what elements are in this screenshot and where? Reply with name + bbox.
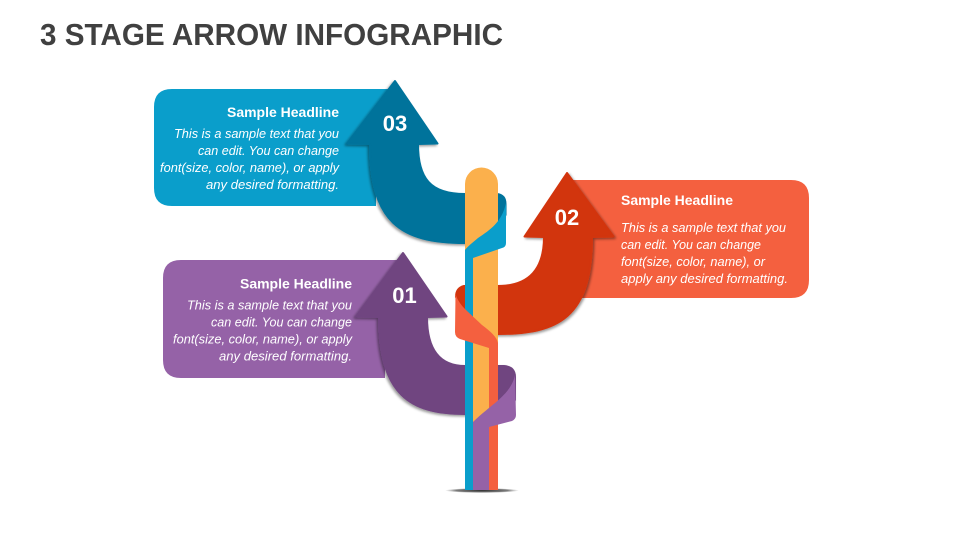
base shadow <box>445 488 519 493</box>
body text: This is a sample text that you <box>621 221 786 235</box>
body text: can edit. You can change <box>621 238 761 252</box>
stage numbers: 01 <box>392 283 417 308</box>
body text <box>160 127 340 192</box>
arrow 03 <box>347 81 506 243</box>
arrow 01 <box>356 253 515 414</box>
headline: Sample Headline <box>227 104 339 120</box>
body text: any desired formatting. <box>206 178 339 192</box>
arrow 02 <box>456 173 614 334</box>
body text <box>173 298 353 364</box>
panel: stage 03 card <box>154 89 395 206</box>
stage numbers: 02 <box>555 205 579 230</box>
body text: any desired formatting. <box>219 350 352 364</box>
blue ribbon <box>465 203 506 490</box>
purple ribbon <box>473 375 516 490</box>
central pole <box>465 168 498 490</box>
stage numbers <box>383 111 579 308</box>
orange ribbon <box>455 294 498 490</box>
body text: font(size, color, name), or apply <box>160 161 340 175</box>
title: 3 STAGE ARROW INFOGRAPHIC <box>40 17 503 52</box>
body text: This is a sample text that you <box>174 127 339 141</box>
body text: This is a sample text that you <box>187 298 352 312</box>
headline: Sample Headline <box>240 276 352 292</box>
panel: stage 01 card <box>163 260 404 378</box>
panel: stage 02 card <box>567 180 809 298</box>
stage numbers: 03 <box>383 111 407 136</box>
headline: Sample Headline <box>621 192 733 208</box>
card background <box>154 89 395 206</box>
body text: can edit. You can change <box>198 144 339 158</box>
body text: font(size, color, name), or <box>621 255 766 269</box>
body text: font(size, color, name), or apply <box>173 332 353 346</box>
body text <box>621 221 788 286</box>
card background <box>163 260 404 378</box>
body text: apply any desired formatting. <box>621 272 788 286</box>
body text: can edit. You can change <box>211 316 352 330</box>
card background <box>567 180 809 298</box>
